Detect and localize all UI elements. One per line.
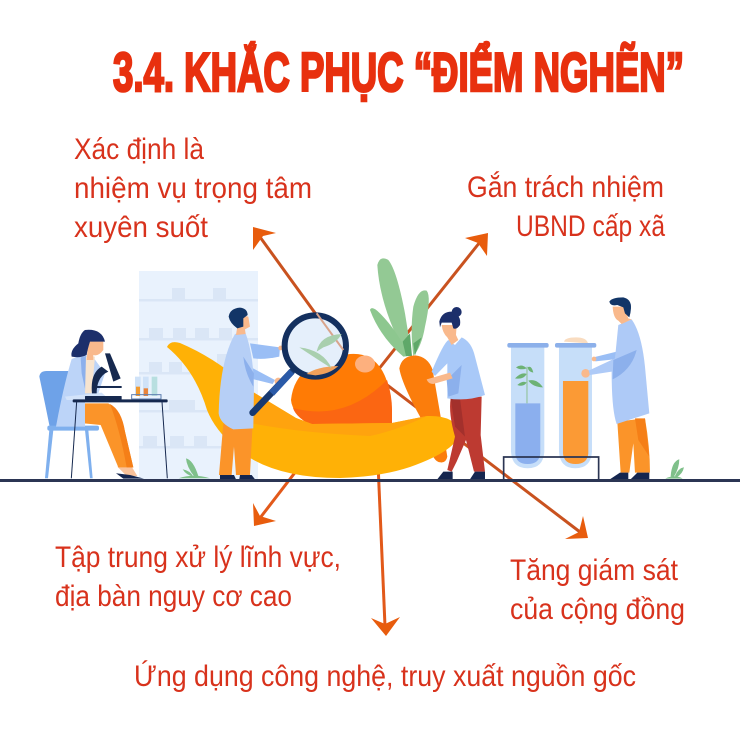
head and hair: [236, 315, 250, 335]
flasks on the table: [132, 377, 161, 399]
illustration: plant at shelf base: [179, 458, 210, 478]
text: top left task: nhiệm vụ trọng tâm: [74, 172, 312, 205]
text: top left task: Xác định là: [74, 133, 204, 166]
illustration: scientist with magnifier: [219, 308, 346, 479]
text: lower right task: [510, 554, 685, 626]
illustration: woman holding carrot: [427, 307, 485, 479]
text: top right task: UBND cấp xã: [516, 210, 665, 243]
text: top left task: xuyên suốt: [74, 211, 209, 244]
arrow: top left: [253, 227, 378, 400]
head and hair: [613, 307, 632, 324]
arrow: top right: [378, 233, 488, 370]
arrow: bottom: [371, 440, 400, 636]
text: lower left task: địa bàn nguy cơ cao: [55, 580, 292, 613]
leaves: [370, 258, 429, 357]
text: top right task: [467, 171, 665, 243]
text: lower left task: Tập trung xử lý lĩnh vực,: [55, 541, 341, 574]
tube: orange sample: [555, 337, 596, 468]
illustration: scientist at test tubes: [581, 297, 650, 479]
chair: [39, 371, 99, 478]
coat: [56, 356, 105, 427]
text: lower right task: Tăng giám sát: [510, 554, 679, 587]
legs: [617, 418, 650, 473]
illustration: small plant on right: [665, 459, 684, 479]
head and hair: [87, 340, 103, 360]
text: top left task: [74, 133, 312, 244]
coat: [589, 319, 649, 424]
text: lower left task: [55, 541, 341, 613]
text: top right task: Gắn trách nhiệm: [467, 171, 664, 204]
head and hair: [442, 325, 458, 345]
magnifier: [253, 313, 346, 413]
legs: [117, 467, 137, 476]
tube rack: [504, 457, 599, 479]
arms: [593, 350, 623, 361]
illustration: carrot: [370, 258, 447, 462]
text: lower right task: của cộng đồng: [510, 593, 685, 626]
text: bottom task: Ứng dụng công nghệ, truy xuất nguồn gốc: [134, 660, 636, 693]
hand: [427, 373, 453, 384]
legs: [219, 423, 253, 475]
background lab shelf: [139, 271, 258, 479]
illustration: orange fruit: [291, 354, 392, 428]
arms: [250, 343, 280, 359]
arrow: lower right: [378, 378, 588, 539]
tube: plant sample: [507, 343, 549, 468]
illustration: woman at microscope: [39, 330, 168, 479]
arrows radiating from centre: [253, 227, 588, 636]
table: [71, 399, 168, 478]
arrow: lower left: [253, 440, 320, 526]
root: [399, 355, 447, 462]
trousers: [447, 397, 485, 472]
illustration: test tubes: [504, 337, 599, 479]
coat: [219, 332, 254, 429]
illustration: banana: [167, 342, 460, 478]
top: [432, 337, 485, 399]
ground line: [0, 479, 740, 482]
microscope: [85, 353, 122, 400]
